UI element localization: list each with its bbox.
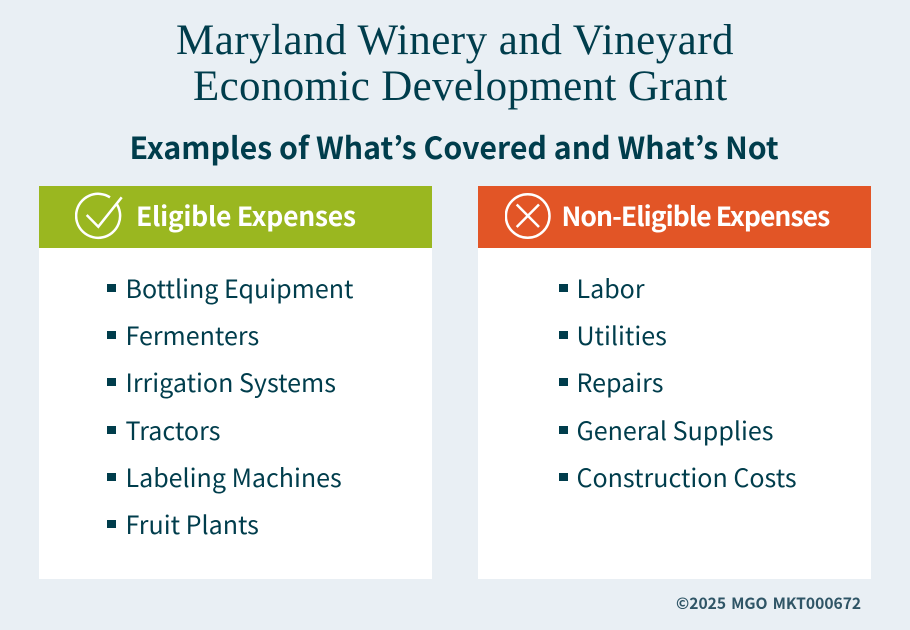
panel: non-eligible expenses	[478, 186, 871, 579]
footer credit: ©2025 MGO MKT000672	[676, 592, 861, 614]
list: non-eligible items	[559, 270, 797, 495]
item: Irrigation Systems	[126, 364, 336, 400]
item: Fruit Plants	[126, 506, 259, 542]
title: Maryland Winery and Vineyard	[176, 17, 734, 64]
item: Utilities	[576, 317, 667, 353]
panel: eligible expenses	[39, 186, 432, 579]
panel header: non-eligible	[478, 186, 871, 248]
heading: non-eligible expenses: Non-Eligible Expenses	[562, 195, 829, 234]
heading: eligible expenses: Eligible Expenses	[136, 195, 356, 234]
item: Tractors	[126, 412, 220, 448]
title: Economic Development Grant	[193, 63, 728, 110]
list: eligible items	[107, 270, 354, 542]
item: Labor	[576, 270, 645, 306]
item: Bottling Equipment	[126, 270, 353, 306]
item: General Supplies	[576, 412, 773, 448]
item: Construction Costs	[576, 459, 797, 495]
icon: check mark in circle	[75, 192, 123, 240]
item: Labeling Machines	[126, 459, 342, 495]
title	[176, 17, 734, 110]
item: Fermenters	[126, 317, 259, 353]
panel header: eligible	[39, 186, 432, 248]
icon: x in circle	[505, 193, 551, 239]
subtitle: Examples of What’s Covered and What’s Not	[130, 124, 779, 168]
item: Repairs	[576, 364, 663, 400]
